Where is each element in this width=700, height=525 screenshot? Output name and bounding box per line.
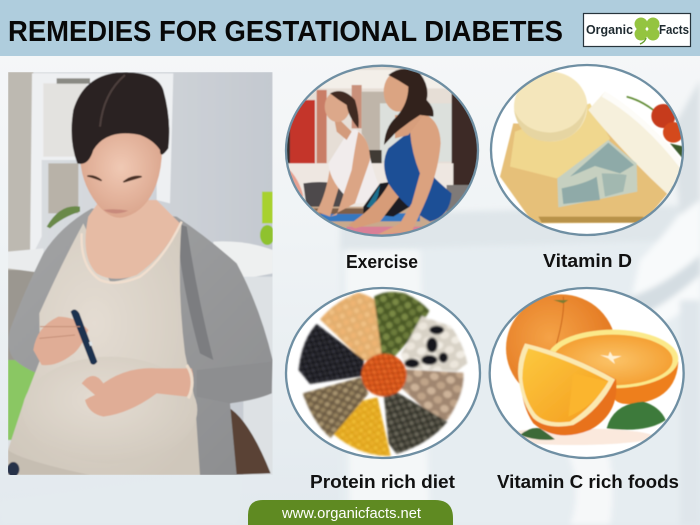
logo: Organic Facts: Facts [659, 22, 689, 37]
top [8, 222, 200, 475]
label: Exercise: Exercise [346, 252, 418, 272]
hand right and forearm [82, 368, 193, 417]
photo: cheese board [491, 65, 684, 235]
face [80, 126, 162, 218]
photo: yoga class [280, 60, 487, 240]
footer: website tab: www.organicfacts.net [281, 505, 422, 522]
hand left with lancet [33, 317, 88, 365]
photo: pregnant woman testing blood sugar [7, 72, 275, 477]
label: Vitamin C rich foods: Vitamin C rich foods [497, 472, 679, 492]
icon: clover [634, 18, 660, 44]
label: Vitamin D: Vitamin D [543, 251, 632, 271]
hair [72, 72, 169, 164]
photo: legumes wheel [286, 288, 480, 458]
neck chest [86, 200, 180, 279]
title: REMEDIES FOR GESTATIONAL DIABETES [8, 16, 563, 48]
panel: protein rich diet [286, 288, 480, 492]
logo: Organic Facts [584, 14, 690, 46]
woman body cardigan [8, 208, 273, 475]
logo: Organic Facts: Organic [586, 22, 633, 37]
photo: oranges [490, 288, 684, 458]
label: Protein rich diet: Protein rich diet [310, 472, 455, 492]
panel: vitamin C rich foods [490, 288, 684, 492]
back woman [317, 167, 340, 217]
footer: website tab [248, 500, 453, 525]
header band [0, 0, 700, 56]
front woman [348, 182, 402, 228]
panel: exercise [280, 60, 487, 272]
panel: vitamin D [491, 65, 684, 271]
